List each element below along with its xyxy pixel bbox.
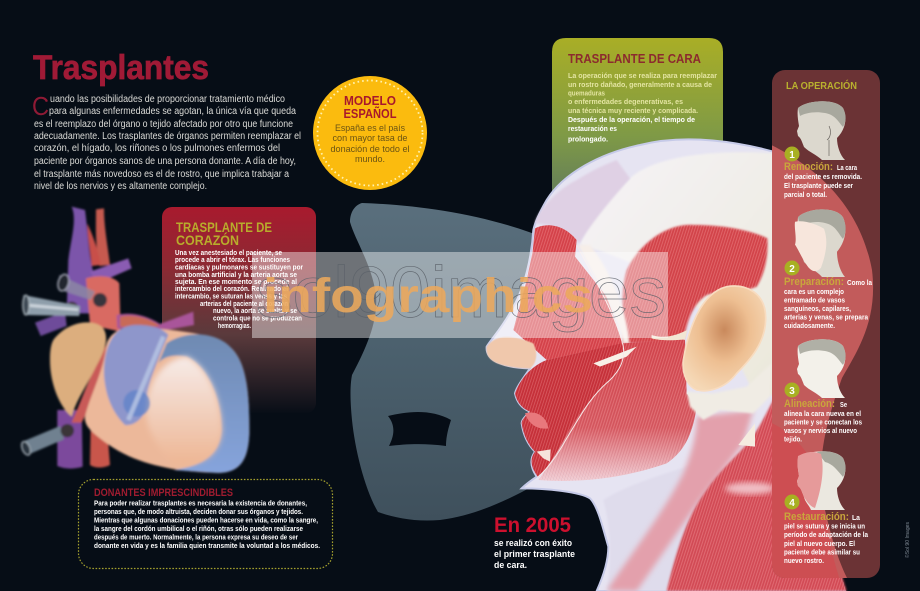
step 4: período de adaptación de la — [784, 530, 869, 539]
step 3: Alineación: — [784, 398, 835, 410]
intro text block: el trasplante más novedoso es el de rostro, que implica trabajar a — [34, 169, 289, 180]
step 1: parcial o total. — [784, 190, 827, 199]
step 2: Como la — [847, 278, 873, 287]
step 4: Restauración: — [784, 511, 849, 523]
step 2: arterias y venas, se prepara — [784, 312, 869, 322]
illustration: grey mask — [350, 203, 560, 521]
heading: la operación: LA OPERACIÓN — [786, 79, 857, 92]
step 1: Remoción: — [784, 161, 833, 173]
step 4: piel se sutura y se inicia un — [784, 522, 865, 530]
neck lower pale — [603, 463, 727, 591]
panel: donantes imprescindibles — [78, 480, 332, 568]
text: en 2005: de cara. — [494, 560, 527, 571]
callout: modelo español: ESPAÑOL — [344, 106, 397, 121]
text: en 2005: En 2005 — [494, 514, 571, 537]
panel: trasplante de corazón: arterias del paciente al corazón — [200, 299, 288, 308]
panel: trasplante de cara: prolongado. — [568, 134, 608, 144]
panel: trasplante de corazón: Una vez anestesiado el paciente, se — [175, 248, 282, 257]
icon: head 4 — [797, 451, 846, 510]
ear — [683, 286, 766, 391]
callout: modelo español: MODELO — [344, 93, 396, 108]
panel: donantes imprescindibles: donante en vida y es la familia quien transmite la voluntad a los médicos. — [94, 541, 320, 550]
panel: trasplante de cara — [552, 38, 723, 215]
panel: donantes imprescindibles: personas que, de modo altruista, deciden donar sus órganos y tejidos. — [94, 507, 303, 516]
mouth muscles — [515, 343, 624, 477]
title: Trasplantes — [33, 49, 209, 87]
step 3: 3 — [789, 386, 795, 397]
panel: trasplante de corazón: CORAZÓN — [176, 231, 239, 248]
panel: trasplante de corazón: intercambio, se suturan las venas y las — [175, 292, 287, 300]
heading: corazón: TRASPLANTE DE — [176, 219, 272, 235]
panel: donantes imprescindibles: Mientras que algunas donaciones pueden hacerse en vida, como la sangre, — [94, 516, 318, 524]
temporal muscle — [622, 225, 768, 343]
step 3: paciente y se conectan los — [784, 418, 862, 426]
icon: head 2 — [795, 209, 846, 277]
intro text block: adecuadamente. Los trasplantes de órganos permiten reemplazar el — [34, 131, 301, 142]
watermark outline text: sol90images — [256, 253, 666, 333]
step 4: La — [852, 513, 861, 522]
nose — [487, 337, 536, 368]
white forehead band — [578, 245, 629, 343]
panel: trasplante de corazón: una bomba artificial y la arteria aorta se — [175, 270, 297, 279]
white tendon — [687, 363, 772, 420]
step 2 — [784, 209, 873, 330]
step 2: cara es un complejo — [784, 287, 844, 296]
panel: trasplante de corazón: hemorragias. — [218, 321, 251, 330]
neck muscles — [667, 387, 847, 591]
step 4: paciente debe asimilar su — [784, 548, 860, 556]
step 1 — [784, 101, 862, 199]
panel: trasplante de cara: Después de la operación, el tiempo de — [568, 115, 695, 124]
step 4: nuevo rostro. — [784, 556, 824, 565]
panel: trasplante de corazón: procede a abrir el tórax. Las funciones — [175, 255, 290, 264]
callout: modelo español: España es el país — [335, 123, 405, 134]
head base — [487, 139, 845, 591]
icon: head 3 — [797, 339, 846, 398]
sternomastoid band — [607, 410, 753, 591]
step 2: Preparación: — [784, 276, 844, 288]
text: en 2005 — [494, 514, 575, 571]
step 4 — [784, 451, 869, 565]
panel: trasplante de cara: restauración es — [568, 124, 617, 133]
panel: trasplante de corazón — [162, 207, 316, 413]
intro text block: uando las posibilidades de proporcionar tratamiento médico — [50, 94, 285, 105]
intro text block: corazón, el hígado, los riñones o los pulmones enfermos del — [34, 143, 280, 154]
intro text block — [32, 91, 301, 192]
scalp — [580, 152, 782, 397]
icon: head 1 — [797, 101, 846, 160]
panel: donantes imprescindibles: la sangre del cordón umbilical o el riñón, otras sólo pueden realizarse — [94, 524, 303, 533]
step 3: vasos y nervios al nuevo — [784, 426, 857, 435]
callout: modelo español: mundo. — [355, 154, 385, 165]
step 1: La cara — [837, 163, 858, 172]
step 3: Se — [840, 400, 847, 409]
step 3 — [784, 339, 862, 444]
forehead muscle pale — [535, 160, 630, 243]
credit: ©Sol 90 Images — [904, 522, 911, 558]
step 2: cuidadosamente. — [784, 321, 835, 330]
panel: trasplante de corazón: sujeta. En ese momento se procede al — [175, 277, 297, 286]
panel: trasplante de corazón: intercambio del corazón. Realizado el — [175, 284, 288, 293]
drop cap: C — [32, 91, 49, 121]
illustration: head with muscles — [487, 139, 847, 591]
panel: trasplante de corazón: cardíacas y pulmonares se sustituyen por — [175, 262, 303, 272]
panel: trasplante de corazón: controla que no se produzcan — [213, 314, 302, 322]
text: en 2005: el primer trasplante — [494, 549, 575, 560]
step 3: alinea la cara nueva en el — [784, 409, 861, 418]
panel: donantes imprescindibles: después de muerto. Normalmente, la persona expresa su deseo de ser — [94, 532, 298, 542]
callout: modelo español: donación de todo el — [330, 144, 410, 155]
panel: trasplante de corazón: nuevo, la aorta se suelta y se — [213, 306, 297, 315]
watermark — [252, 252, 668, 338]
watermark orange text: infographics — [263, 270, 593, 323]
panel: trasplante de cara: una técnica muy reciente y complicada. — [568, 106, 698, 115]
intro text block: nivel de los nervios y es altamente complejo. — [34, 181, 207, 192]
step 2: sanguíneos, capilares, — [784, 304, 851, 313]
step 3: tejido. — [784, 434, 802, 444]
face outline — [537, 245, 624, 477]
illustration: heart — [20, 207, 249, 473]
panel: trasplante de cara: un rostro dañado, generalmente a causa de — [568, 80, 712, 89]
intro text block: paciente por órganos sanos de una persona donante. A día de hoy, — [34, 156, 296, 167]
step 2: 2 — [789, 264, 795, 275]
step 1: 1 — [789, 150, 795, 161]
intro text block: es el reemplazo del órgano o tejido afectado por otro que funcione — [34, 119, 293, 130]
panel: la operación — [765, 70, 880, 580]
intro text block: para algunas enfermedades se agotan, la única vía que queda — [49, 106, 296, 117]
step 1: del paciente es removida. — [784, 172, 862, 181]
callout: modelo español — [313, 76, 427, 190]
step 2: entramado de vasos — [784, 296, 845, 304]
panel: trasplante de cara: o enfermedades degenerativas, es — [568, 97, 683, 106]
panel: trasplante de cara: La operación que se realiza para reemplazar — [568, 71, 717, 80]
heading: cara: TRASPLANTE DE CARA — [568, 52, 701, 66]
callout: modelo español: con mayor tasa de — [332, 133, 408, 144]
cheek muscles — [538, 340, 697, 481]
forehead red — [513, 225, 623, 360]
panel: trasplante de cara: quemaduras — [568, 88, 605, 98]
step 4: 4 — [789, 498, 795, 509]
neck pale patch — [725, 482, 775, 494]
text: en 2005: se realizó con éxito — [494, 538, 572, 549]
panel: donantes imprescindibles: Para poder realizar trasplantes es necesaria la existencia de donantes, — [94, 498, 307, 508]
step 4: piel al nuevo cuerpo. El — [784, 539, 855, 548]
heading: donantes: DONANTES IMPRESCINDIBLES — [94, 487, 233, 499]
step 1: El trasplante puede ser — [784, 181, 853, 190]
